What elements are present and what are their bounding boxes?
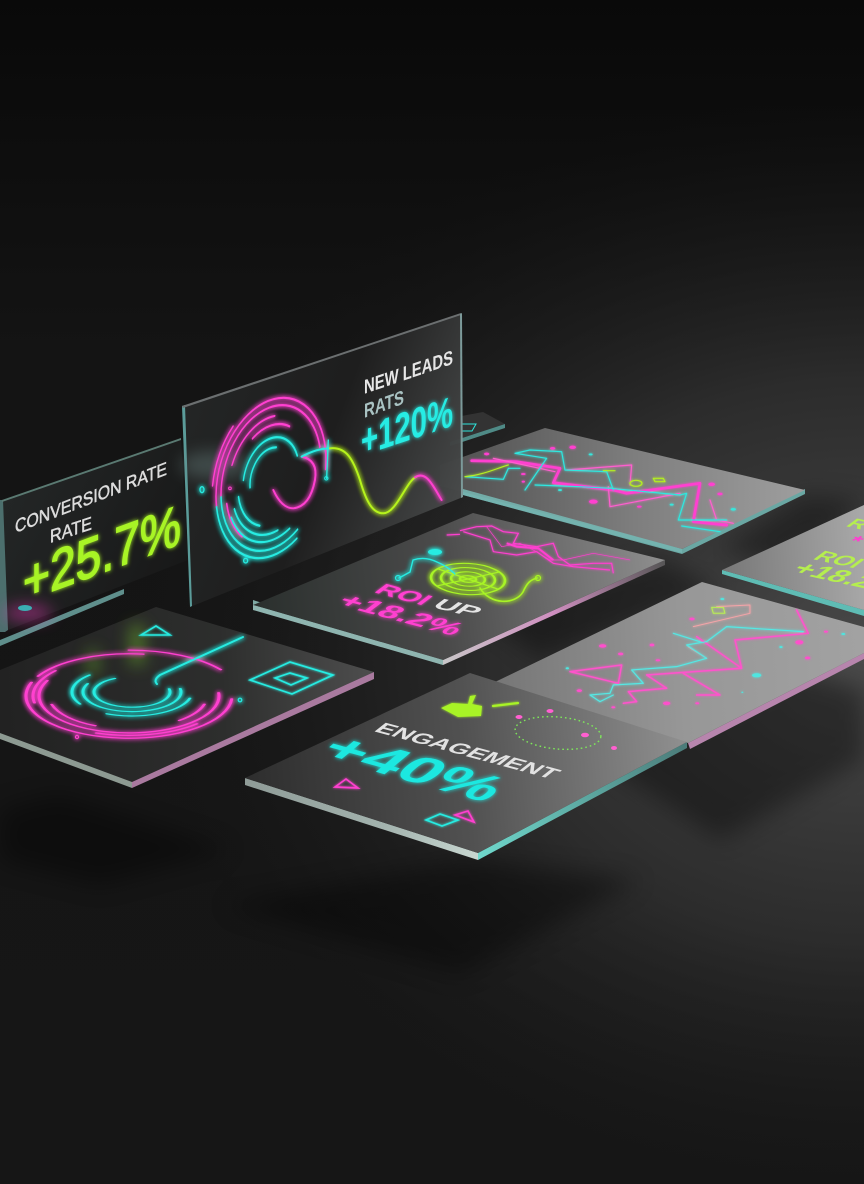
icon: cyan square: [426, 814, 458, 826]
icon: triangle: [141, 626, 170, 635]
value: +40%: +40%: [307, 727, 520, 810]
ring chart: [0, 637, 268, 753]
label: roi: ROI: [369, 581, 438, 608]
pink dots: [516, 709, 617, 750]
panel: engagement: [245, 673, 687, 860]
zigzag chart: [566, 598, 845, 708]
back plate behind new leads: [440, 412, 505, 446]
dotted circle: [514, 713, 602, 753]
icon: nested squares: [250, 662, 333, 694]
panel: left rings: [0, 607, 374, 788]
ring chart: [197, 348, 442, 608]
heading: engagement: ENGAGEMENT: [369, 720, 566, 782]
label: rats: RATS: [364, 386, 404, 423]
icon: green megaphone: [441, 695, 518, 717]
panel: new leads: [180, 313, 463, 608]
icon: magenta triangle: [455, 811, 474, 822]
icon: pink triangle: [335, 779, 358, 788]
panel: right partial: [722, 505, 864, 616]
value: +120%: +120%: [361, 388, 453, 466]
heading: conversion rate: CONVERSION RATE: [15, 459, 167, 538]
target chart: [396, 549, 540, 601]
zigzag chart: [465, 446, 736, 532]
panel: lower right chart: [495, 582, 864, 749]
label: rate: RATE: [50, 514, 92, 548]
pink scribble chart: [447, 526, 630, 573]
value: +18.2%: +18.2%: [330, 590, 471, 640]
panel: roi up: [253, 513, 665, 665]
value: +25.7%: +25.7%: [23, 493, 181, 615]
label: up: UP: [427, 596, 488, 620]
panel: top right chart: [440, 428, 805, 554]
heading: new leads: NEW LEADS: [364, 346, 453, 399]
floor shadows: [0, 495, 864, 975]
panel: conversion rate: [0, 438, 188, 646]
